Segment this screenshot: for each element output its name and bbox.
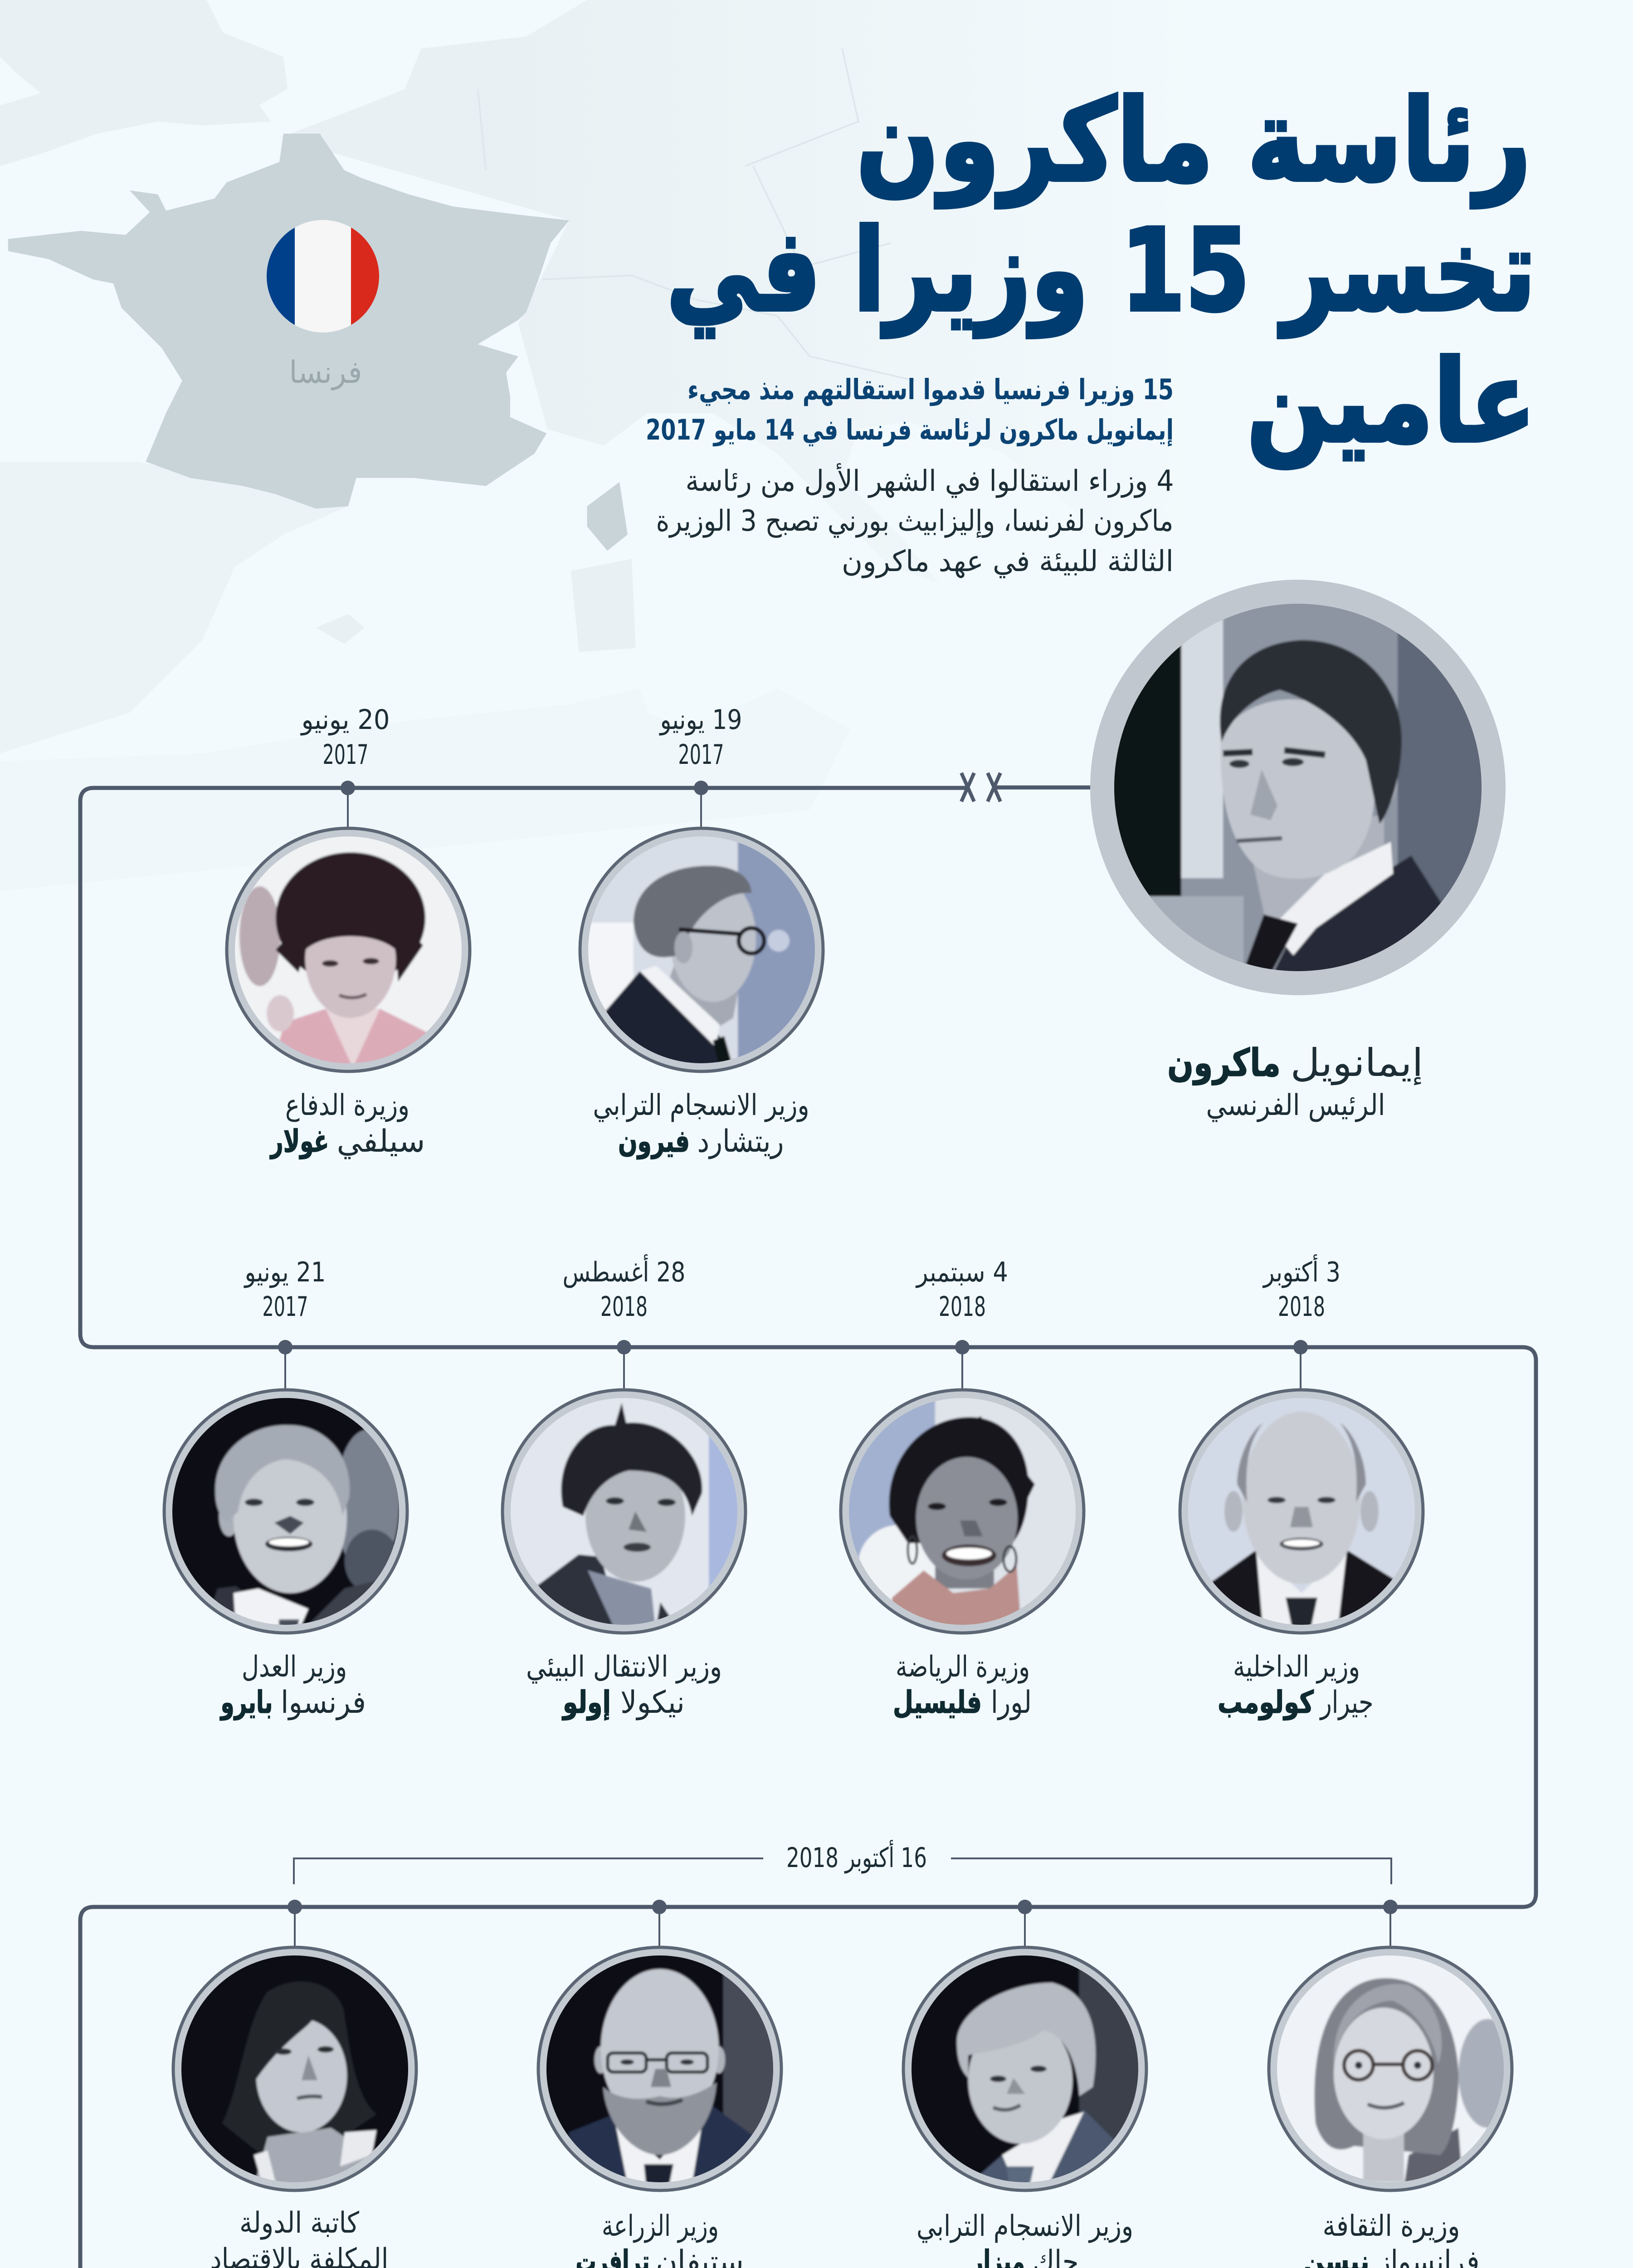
date [659,704,742,771]
name: إولو [562,1685,611,1721]
timeline line [80,787,1633,2268]
map shape: Corsica [587,482,628,551]
portrait: Flessel [841,1390,1084,1633]
date: 20 يونيو [300,704,390,736]
date [562,1254,686,1323]
date: 21 يونيو [244,1256,326,1288]
date: 2018 [1278,1291,1325,1323]
intro text: ماكرون لفرنسا، وإليزابيث بورني تصبح 3 الوزيرة [656,504,1174,538]
name [1303,2244,1479,2268]
date [300,704,390,771]
date: 2018 [600,1291,648,1323]
title: رئاسة ماكرون [856,75,1531,208]
name: بايرو [219,1685,273,1721]
role: وزيرة الثقافة [1322,2209,1460,2243]
date bracket: 16 October 2018: 16 أكتوبر 2018 [786,1840,927,1874]
panel: Ferrand [580,704,823,1159]
panel: Travert [538,1900,781,2268]
role: وزير الانسجام الترابي [593,1089,809,1122]
portrait: Mézard [903,1947,1146,2190]
intro text: الثالثة للبيئة في عهد ماكرون [842,545,1174,578]
connector [341,781,355,829]
role: وزيرة الدفاع [285,1089,409,1122]
connector [617,1340,631,1390]
connector [278,1340,292,1390]
portrait: Bayrou [164,1390,407,1633]
name [618,1124,784,1159]
icon: French flag [267,220,379,332]
role: وزير العدل [242,1650,347,1684]
panel: Flessel [841,1256,1084,1721]
map shape: France [8,134,569,508]
intro text [656,463,1174,578]
portrait: Collomb [1180,1390,1423,1633]
portrait: Hulot [502,1390,746,1633]
portrait: Goulard [227,828,470,1071]
role: وزير الداخلية [1233,1650,1360,1684]
date: 28 أغسطس [562,1254,686,1288]
connector [288,1900,302,1948]
date: 4 سبتمبر [915,1256,1008,1288]
role: وزير الانتقال البيئي [526,1650,722,1684]
title [667,75,1536,469]
name: سيلفي [336,1124,425,1159]
date: 3 أكتوبر [1262,1254,1341,1288]
date: 19 يونيو [659,704,742,736]
name: لورا [991,1685,1032,1721]
portrait: Gény-Stéphann [173,1947,416,2190]
subtitle: 15 وزيرا فرنسيا قدموا استقالتهم منذ مجيء [687,373,1174,406]
name [562,1685,685,1721]
name [576,2244,744,2268]
name: غولار [269,1124,329,1159]
subtitle [646,373,1174,446]
role: وزير الزراعة [602,2209,719,2243]
connector [652,1900,667,1948]
role: وزير الانسجام الترابي [916,2209,1133,2243]
connector [694,781,708,829]
portrait: Travert [538,1947,781,2190]
role: كاتبة الدولة [239,2206,359,2240]
intro text: 4 وزراء استقالوا في الشهر الأول من رئاسة [686,463,1174,498]
name: فليسيل [893,1685,982,1721]
connector [1018,1900,1032,1948]
date: 2017 [678,739,724,771]
name [219,1685,366,1721]
date: 2017 [262,1291,308,1323]
date [1262,1254,1341,1323]
break marks [961,773,1000,802]
panel: Bayrou [164,1256,407,1721]
panel: Gény-Stéphann [173,1900,416,2268]
role: وزيرة الرياضة [896,1650,1030,1684]
label: France: فرنسا [289,355,362,391]
name: Macron: ماكرون [1167,1041,1281,1085]
date [915,1256,1008,1323]
name: نيكولا [620,1685,685,1721]
date: 2018 [939,1291,986,1323]
name [269,1124,425,1159]
connector [955,1340,970,1390]
title: عامين [1247,336,1536,469]
role [210,2206,388,2268]
name: Macron [1167,1041,1423,1085]
panel: Goulard [227,704,470,1159]
panel: Hulot [502,1254,746,1721]
title: تخسر 15 وزيرا في [667,205,1536,338]
date bracket: 16 October 2018 [294,1840,1391,1884]
date: 2017 [323,739,368,771]
name: فيرون [618,1124,690,1159]
portrait: Macron [1090,580,1506,995]
subtitle: إيمانويل ماكرون لرئاسة فرنسا في 14 مايو 2017 [646,413,1174,446]
role: Macron: الرئيس الفرنسي [1206,1089,1385,1122]
panel: Collomb [1180,1254,1423,1721]
portrait: Ferrand [580,828,823,1071]
connector [1383,1900,1398,1948]
panel: Nyssen [1269,1900,1517,2268]
portrait: Nyssen [1269,1947,1517,2190]
panel: Mézard [903,1900,1146,2268]
name: جيرار [1319,1685,1373,1721]
panel: Macron [1090,580,1506,1122]
connector [1293,1340,1308,1390]
date [244,1256,326,1323]
name: ريتشارد [697,1124,784,1159]
name: كولومب [1218,1685,1314,1721]
name: Macron: إيمانويل [1291,1041,1423,1085]
background map of Europe [0,0,1212,891]
name: فرنسوا [281,1685,366,1721]
France map [8,134,628,551]
